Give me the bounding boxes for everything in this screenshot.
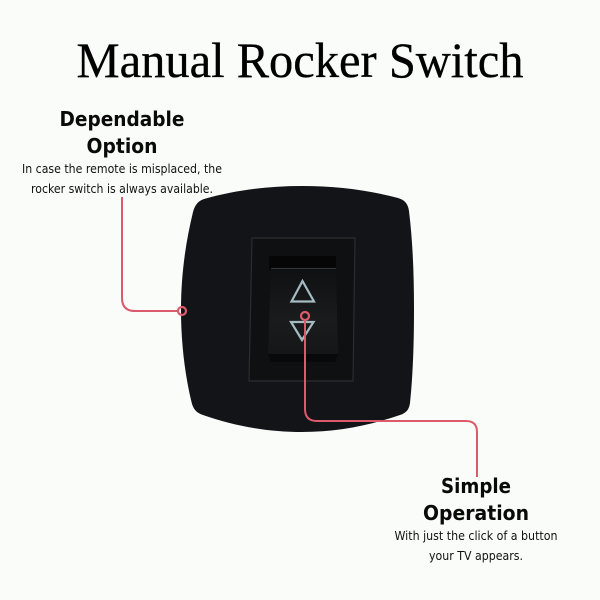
description: dependable option (22, 162, 222, 196)
heading line two: option: Option (86, 134, 158, 158)
connector: simple operation (301, 312, 477, 477)
rocker top highlight (271, 268, 336, 270)
switch image (181, 186, 414, 432)
description: simple operation (394, 529, 558, 563)
title: Manual Rocker Switch (76, 32, 524, 88)
description: simple operation: your TV appears. (429, 549, 523, 563)
rocker button (268, 268, 338, 354)
rocker bottom shadow (268, 354, 338, 362)
switch housing (249, 238, 355, 381)
callout: simple operation (394, 474, 558, 563)
icon: down triangle (291, 322, 314, 340)
switch faceplate (181, 186, 414, 432)
heading: dependable option: Dependable (60, 107, 184, 131)
switch recess (269, 256, 336, 270)
icon: up triangle (292, 281, 314, 302)
connector: dependable option (122, 197, 186, 315)
callout: dependable option (22, 107, 222, 196)
heading: simple: Simple (441, 474, 511, 498)
description: dependable option: In case the remote is misplaced, the (22, 162, 222, 176)
heading line two: operation: Operation (423, 501, 529, 525)
description: simple operation: With just the click of a button (394, 529, 558, 543)
description: dependable option: rocker switch is always available. (31, 182, 213, 196)
